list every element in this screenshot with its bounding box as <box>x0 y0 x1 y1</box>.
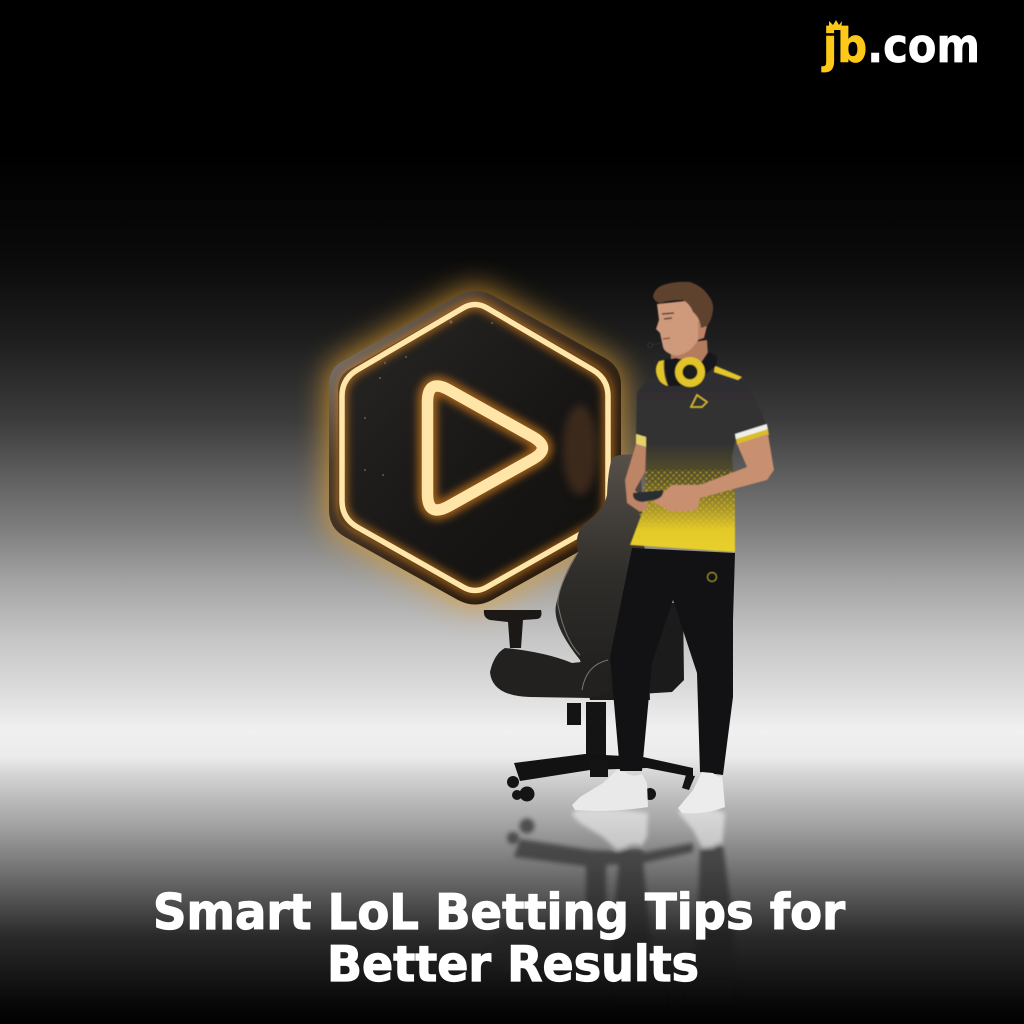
hair <box>653 282 713 328</box>
stitching <box>558 552 608 690</box>
hexagon neon line <box>342 304 608 590</box>
base <box>514 754 693 781</box>
mouth <box>663 338 670 339</box>
armrest <box>484 610 542 648</box>
ear <box>698 318 708 340</box>
pants logo <box>708 572 716 582</box>
game controller <box>633 490 663 502</box>
player upper body <box>625 282 774 582</box>
left shoe <box>572 770 648 811</box>
casters <box>507 775 695 802</box>
floor reflection <box>504 809 732 935</box>
hexagon glow <box>329 291 621 604</box>
play triangle halo <box>428 386 542 510</box>
left arm <box>625 444 650 512</box>
jersey logo <box>691 395 707 407</box>
logo: jb.com <box>821 19 980 74</box>
chair backrest <box>556 454 650 700</box>
title line 2: Better Results <box>327 936 699 993</box>
right arm <box>653 434 774 512</box>
gaming chair <box>484 454 695 802</box>
shoulder stripe <box>714 366 742 380</box>
surface dust specks <box>364 320 493 476</box>
crown icon <box>829 20 842 30</box>
player trousers <box>610 548 735 775</box>
chair rear panel <box>640 600 684 694</box>
column <box>586 702 606 758</box>
title <box>153 884 846 993</box>
jersey dot pattern <box>639 470 735 524</box>
hexagon body <box>329 290 621 604</box>
right shoe <box>678 772 725 813</box>
logo wordmark: jb.com <box>821 19 980 74</box>
neck <box>670 340 709 386</box>
eye and brow <box>662 313 674 319</box>
seat <box>490 648 612 698</box>
icon: glowing hexagon play badge <box>329 290 621 604</box>
mic <box>652 343 660 345</box>
play triangle neon <box>428 386 542 510</box>
sleeve cuff right <box>735 424 769 445</box>
headphones <box>656 352 717 387</box>
jersey <box>630 365 768 552</box>
face <box>656 300 704 355</box>
lever <box>567 703 581 725</box>
hexagon neon halo <box>342 304 608 590</box>
sleeve cuff left <box>636 434 646 447</box>
hub <box>590 760 608 777</box>
surface reflection <box>563 405 597 495</box>
title line 1: Smart LoL Betting Tips for <box>153 884 846 941</box>
